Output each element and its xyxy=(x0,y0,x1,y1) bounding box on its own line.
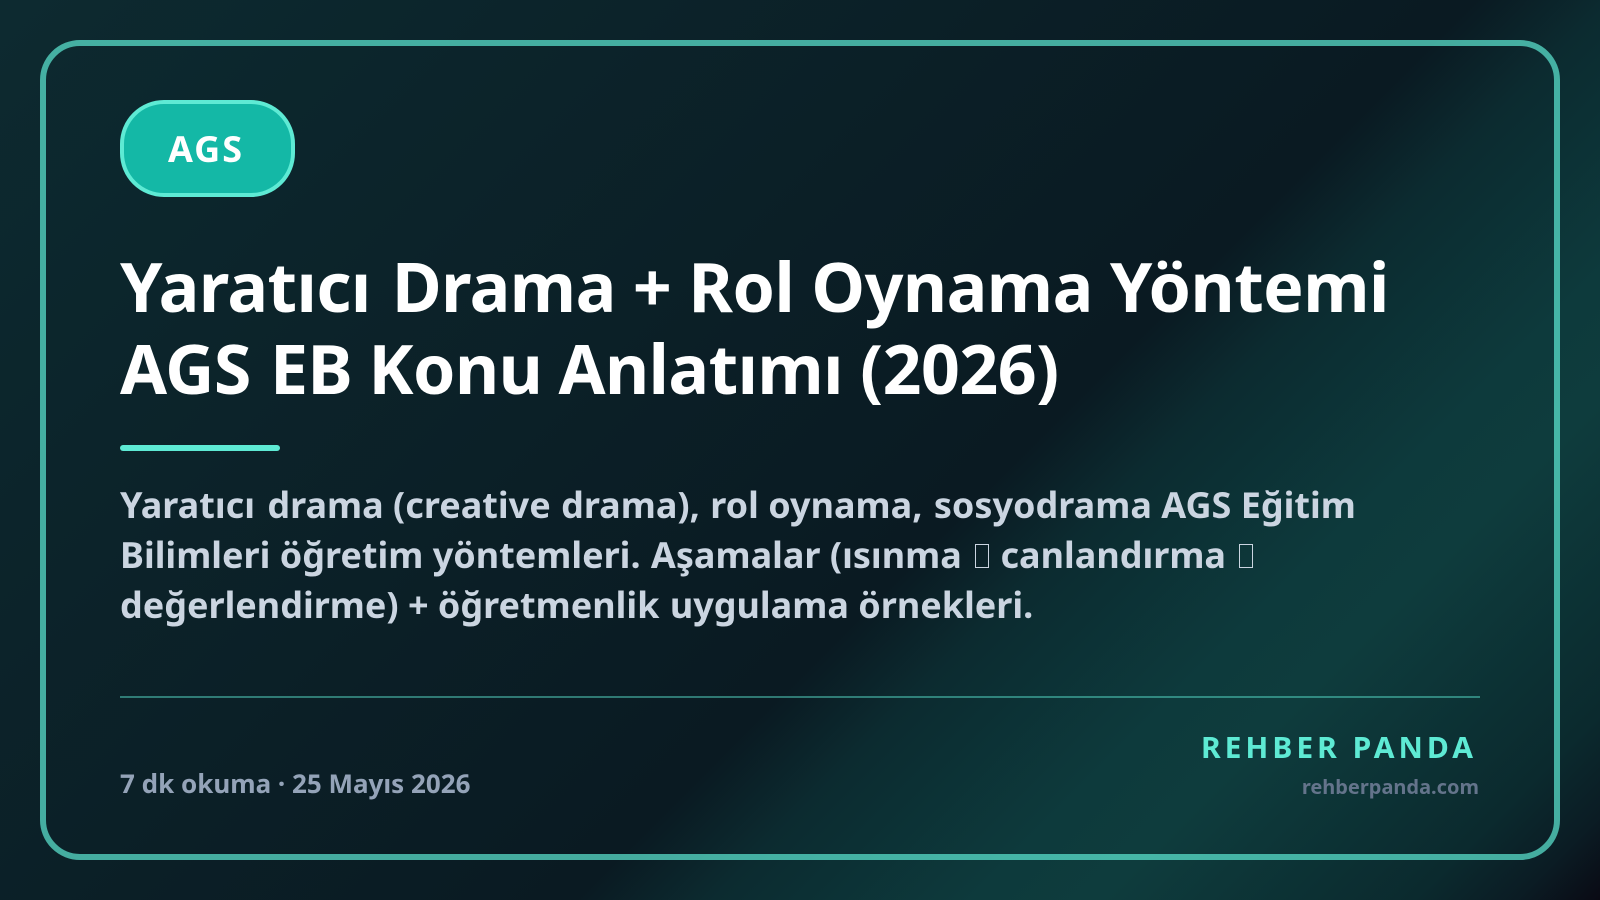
footer divider xyxy=(120,696,1480,698)
title: Yaratıcı Drama + Rol Oynama Yöntemi xyxy=(120,239,1389,332)
accent bar xyxy=(120,445,280,451)
brand name: REHBER PANDA xyxy=(1201,726,1477,767)
description: değerlendirme) + öğretmenlik uygulama örnekleri. xyxy=(120,580,1033,629)
description: Bilimleri öğretim yöntemleri. Aşamalar (ısınma canlandırma xyxy=(120,530,1226,579)
title xyxy=(120,239,1389,414)
website: rehberpanda.com xyxy=(1302,772,1479,800)
title: AGS EB Konu Anlatımı (2026) xyxy=(120,321,1059,414)
category badge: AGS xyxy=(120,100,295,197)
category badge: AGS: AGS xyxy=(168,124,244,173)
description: Yaratıcı drama (creative drama), rol oynama, sosyodrama AGS Eğitim xyxy=(120,480,1356,529)
reading time and date: 7 dk okuma · 25 Mayıs 2026 xyxy=(120,765,470,801)
description xyxy=(120,480,1356,629)
